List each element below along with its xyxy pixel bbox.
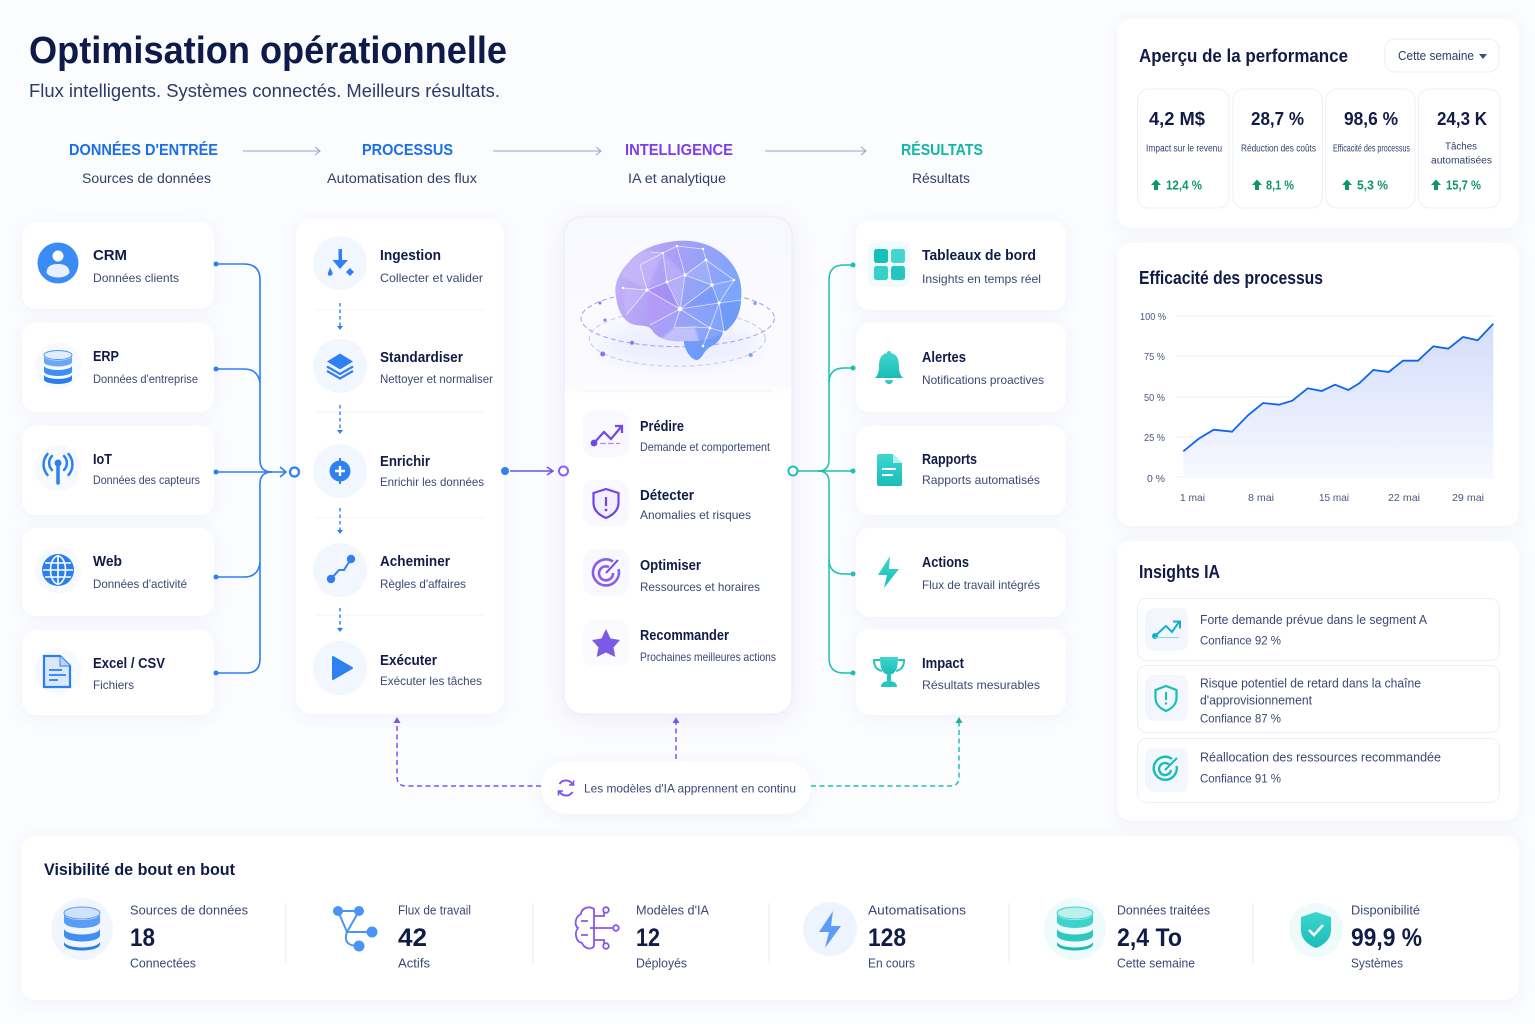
card: CRM: Données clients [93,271,179,285]
card: Rapports: Rapports [922,452,977,468]
card: Alertes: Notifications proactives [922,373,1044,387]
panel: visibilité de bout en bout [21,836,1519,1000]
callout: continuous learning [541,761,811,814]
stat: sources de données [51,898,248,970]
card: IoT [22,426,214,515]
item: Prédire [583,411,771,457]
stat: automatisations: Automatisations [868,904,966,918]
item: Exécuter: Exécuter [380,653,437,669]
insight: forte demande: Forte demande prévue dans le segment A [1200,613,1428,627]
line chart: 29 mai [1452,492,1484,504]
column heading: intelligence [625,142,733,186]
line chart [1140,311,1494,504]
stat: automatisations: 128 [868,924,906,952]
column heading: processus [327,142,477,186]
line chart: 50 % [1144,392,1165,404]
subtitle: Flux intelligents. Systèmes connectés. Meilleurs résultats. [29,81,500,101]
panel: intelligence [564,217,792,714]
item: Détecter: Anomalies et risques [640,508,751,522]
card: IoT: Données des capteurs [93,473,200,487]
line chart: 15 mai [1319,492,1349,504]
insight: risque de retard: Confiance 87 % [1200,712,1281,726]
stat: données traitées: Données traitées [1117,904,1210,918]
kpi: réduction des coûts: 8,1 % [1266,178,1294,192]
column heading: processus: PROCESSUS [362,142,453,159]
card: ERP [22,323,214,412]
stat: données traitées: 2,4 To [1117,924,1182,952]
panel: résultats [856,221,1066,715]
stat: modèles d'IA: 12 [636,924,660,952]
panel: processus [296,219,504,714]
icon: antenna [35,445,81,491]
card: IoT: IoT [93,452,112,468]
icon: trend [592,426,622,445]
kpi: tâches automatisées: 24,3 K [1437,108,1488,129]
icon: play [333,657,352,679]
insight: risque de retard [1138,666,1500,732]
icon: trend [1153,622,1180,638]
insight: risque de retard: Risque potentiel de retard dans la chaîne [1200,676,1421,690]
insight: risque de retard: d'approvisionnement [1200,694,1313,708]
line chart: 0 % [1147,473,1165,485]
icon: dashboard [868,242,910,287]
icon: shield [594,489,618,518]
kpi: tâches automatisées: Tâches [1445,142,1477,152]
panel: sources de données [22,222,214,715]
column heading: données d'entrée [69,140,218,186]
item: Prédire: Prédire [640,419,684,435]
stat: sources de données: Connectées [130,956,196,970]
icon: workflow [333,906,378,952]
arrow: entrée to processus [243,147,320,155]
icon: route [327,555,355,583]
heading: Efficacité des processus [1139,267,1323,288]
item: Ingestion [313,236,483,290]
icon: database [35,343,81,389]
kpi: efficacité des processus: 5,3 % [1357,178,1388,192]
icon: layers [327,354,353,378]
card: Tableaux de bord [856,221,1066,310]
icon: star [592,629,620,657]
item: Exécuter: Exécuter les tâches [380,674,482,688]
panel: efficacité des processus [1117,243,1519,526]
item: Acheminer: Règles d'affaires [380,577,466,591]
item: Recommander: Recommander [640,628,729,644]
column heading: résultats: RÉSULTATS [901,140,983,159]
item: Optimiser: Ressources et horaires [640,580,760,594]
kpi: efficacité des processus [1326,89,1415,208]
line chart: 75 % [1144,351,1165,363]
item: Standardiser: Standardiser [380,350,463,366]
column heading: intelligence: IA et analytique [628,171,726,186]
heading: Insights IA [1139,561,1220,582]
item: Détecter: Détecter [640,488,694,504]
card: Web: Web [93,554,122,570]
column heading: résultats [901,140,983,186]
panel: insights IA [1117,541,1519,821]
stat: sources de données: 18 [130,924,155,952]
card: ERP: Données d'entreprise [93,372,198,386]
card: ERP: ERP [93,349,119,365]
insight: réallocation [1138,738,1500,802]
card: Excel / CSV [22,630,214,715]
callout: continuous learning: Les modèles d'IA apprennent en continu [584,782,796,796]
kpi: réduction des coûts: Réduction des coûts [1241,144,1316,154]
stat: sources de données: Sources de données [130,904,248,918]
icon: globe [35,547,81,593]
arrow: intelligence to résultats [765,147,866,155]
icon: report [877,454,902,486]
stat: flux de travail: 42 [398,924,427,952]
card: Rapports [856,426,1066,515]
card: Web [22,528,214,616]
card: Excel / CSV: Fichiers [93,678,134,692]
column heading: processus: Automatisation des flux [327,171,477,186]
stat: disponibilité: 99,9 % [1351,924,1422,952]
kpi: efficacité des processus: 98,6 % [1344,108,1398,129]
illustration: brain [581,236,774,366]
kpi: efficacité des processus: Efficacité des processus [1333,144,1410,154]
icon: shield [1156,686,1176,711]
stat: modèles d'IA: Modèles d'IA [636,904,710,918]
icon: plus [330,458,350,484]
column heading: données d'entrée: Sources de données [82,171,211,186]
kpi: impact sur le revenu: 12,4 % [1166,178,1202,192]
connectors: sources to process [214,262,299,676]
card: Tableaux de bord: Insights en temps réel [922,272,1041,286]
dropdown: Cette semaine [1398,49,1474,63]
icon: user [38,242,78,284]
stat: flux de travail: Actifs [398,956,430,970]
icon: download [328,249,354,276]
card: Impact [856,629,1066,715]
kpi: tâches automatisées: 15,7 % [1446,178,1481,192]
kpi: tâches automatisées [1418,89,1500,208]
panel: aperçu de la performance [1117,19,1519,228]
item: Optimiser [583,549,760,596]
item: Prédire: Demande et comportement [640,440,771,454]
insight: forte demande: Confiance 92 % [1200,634,1281,648]
stat: automatisations [803,902,966,970]
stat: disponibilité [1289,903,1422,970]
kpi: réduction des coûts [1233,89,1322,208]
line chart: 25 % [1144,432,1165,444]
icon: bell [875,351,903,384]
icon: trophy [874,657,904,687]
card: Web: Données d'activité [93,577,187,591]
item: Recommander [583,620,776,667]
item: Exécuter [313,641,482,695]
card: Actions [856,528,1066,617]
title: Optimisation opérationnelle [29,30,507,72]
card: Alertes: Alertes [922,350,966,366]
connectors: intelligence to results [788,262,856,676]
item: Acheminer [313,543,466,597]
card: Excel / CSV: Excel / CSV [93,656,165,672]
flow arrows [337,303,343,632]
connector: process to intelligence [501,466,568,476]
card: Actions: Actions [922,555,969,571]
line chart: 8 mai [1248,492,1274,504]
icon: AI brain [576,907,619,949]
icon: document [35,648,81,694]
card: Tableaux de bord: Tableaux de bord [922,248,1036,264]
line chart: 1 mai [1180,492,1205,504]
icon: shield check [1301,912,1331,948]
item: Enrichir: Enrichir [380,454,430,470]
card: Alertes [856,323,1066,412]
icon: bolt [819,911,841,948]
item: Détecter [583,480,751,526]
item: Optimiser: Optimiser [640,558,701,574]
stat: données traitées [1044,898,1210,970]
item: Standardiser: Nettoyer et normaliser [380,372,493,386]
stat: disponibilité: Disponibilité [1351,904,1420,918]
item: Acheminer: Acheminer [380,554,450,570]
icon: target [593,559,619,585]
icon: database [64,907,100,950]
heading: Visibilité de bout en bout [44,860,235,879]
card: Impact: Impact [922,656,964,672]
kpi: tâches automatisées: automatisées [1431,156,1492,166]
stat: modèles d'IA: Déployés [636,956,687,970]
heading: Aperçu de la performance [1139,45,1348,66]
insight: forte demande [1138,598,1500,660]
stat: flux de travail: Flux de travail [398,904,471,918]
stat: automatisations: En cours [868,956,915,970]
arrow: processus to intelligence [493,147,601,155]
insight: réallocation: Réallocation des ressources recommandée [1200,750,1441,764]
column heading: intelligence: INTELLIGENCE [625,142,733,159]
icon: bolt [878,556,899,588]
icon: database [1057,907,1093,950]
card: Actions: Flux de travail intégrés [922,578,1040,592]
stat: modèles d'IA [576,904,710,970]
icon: refresh [558,780,574,796]
card: Rapports: Rapports automatisés [922,473,1040,487]
column heading: résultats: Résultats [912,171,970,186]
item: Ingestion: Ingestion [380,248,441,264]
line chart: 22 mai [1388,492,1420,504]
item: Ingestion: Collecter et valider [380,271,483,285]
card: CRM [22,222,214,309]
kpi: impact sur le revenu [1138,89,1229,208]
item: Enrichir [313,444,484,498]
insight: réallocation: Confiance 91 % [1200,772,1281,786]
line chart: 100 % [1140,311,1166,323]
dropdown [1385,39,1499,72]
stat: données traitées: Cette semaine [1117,956,1195,970]
feedback arrows: continuous learning [394,717,962,786]
item: Enrichir: Enrichir les données [380,475,484,489]
stat: disponibilité: Systèmes [1351,956,1403,970]
stat: flux de travail [333,904,471,970]
item: Recommander: Prochaines meilleures actions [640,650,776,664]
card: Impact: Résultats mesurables [922,678,1040,692]
card: CRM: CRM [93,248,127,264]
kpi: impact sur le revenu: Impact sur le revenu [1146,144,1222,154]
item: Standardiser [313,339,493,393]
kpi: réduction des coûts: 28,7 % [1251,108,1304,129]
icon: target [1154,757,1177,780]
column heading: données d'entrée: DONNÉES D'ENTRÉE [69,140,218,159]
kpi: impact sur le revenu: 4,2 M$ [1149,108,1206,129]
